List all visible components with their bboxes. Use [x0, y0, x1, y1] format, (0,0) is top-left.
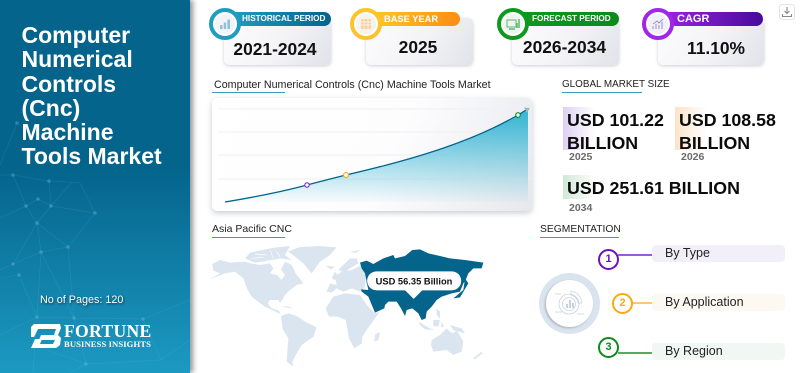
stat: 2034 market size: USD 251.61 BILLION — [567, 178, 740, 198]
panel: CAGR — [642, 8, 766, 68]
heading: segmentation: SEGMENTATION — [540, 224, 621, 235]
stat: 2026 market size — [675, 107, 776, 163]
segment: by type — [598, 245, 785, 270]
segment: by application: 2 — [619, 297, 626, 309]
heading: asia pacific: Asia Pacific CNC — [212, 223, 292, 235]
card — [224, 18, 331, 65]
icon: logo mark — [31, 324, 61, 348]
stat: 2025 market size: USD 101.22 — [567, 110, 664, 130]
area line chart — [218, 108, 530, 203]
header — [374, 12, 460, 26]
card: 2025 — [399, 37, 437, 57]
stat: 2034 market size: 2034 — [569, 202, 592, 214]
logo wordmark: FORTUNE — [64, 321, 152, 341]
card — [512, 18, 619, 65]
segment: by application: By Application — [665, 295, 744, 309]
logo: Fortune Business Insights — [31, 321, 152, 349]
icon: bar chart — [209, 8, 241, 40]
segment: by type: By Type — [665, 246, 710, 260]
panel: line chart card — [212, 98, 532, 211]
panel: historical period — [209, 8, 332, 68]
icon: download — [779, 4, 795, 20]
title: Controls — [22, 71, 116, 97]
header: HISTORICAL PERIOD — [242, 14, 325, 23]
stat: 2025 market size: BILLION — [567, 132, 638, 152]
title: (Cnc) — [22, 95, 80, 121]
world map — [211, 246, 484, 366]
segment: by application — [612, 293, 785, 314]
heading: market chart: Computer Numerical Controls (Cnc) Machine Tools Market — [214, 79, 491, 91]
header: FORECAST PERIOD — [532, 14, 611, 23]
segment: by type: 1 — [605, 253, 612, 265]
panel: base year — [350, 8, 474, 68]
card: 2021-2024 — [233, 39, 317, 59]
card — [366, 18, 473, 65]
text: number of pages: No of Pages: 120 — [40, 294, 123, 306]
stat: 2034 market size — [563, 175, 740, 214]
heading: global market size: GLOBAL MARKET SIZE — [562, 79, 670, 90]
callout: value label — [367, 271, 462, 299]
card: 2026-2034 — [523, 37, 606, 57]
header — [232, 12, 331, 26]
segment: by region: By Region — [665, 344, 723, 358]
asia pacific region — [360, 249, 483, 320]
title: Computer — [22, 22, 130, 48]
title: Tools Market — [22, 143, 162, 169]
icon: growth chart — [642, 8, 674, 40]
network pattern — [0, 121, 190, 373]
icon: segmentation hub — [539, 273, 600, 334]
panel: forecast period — [497, 8, 620, 68]
icon: calendar — [350, 8, 382, 40]
title: Numerical — [22, 46, 133, 72]
stat: 2025 market size — [563, 107, 664, 163]
header — [521, 12, 619, 26]
header: BASE YEAR — [384, 14, 438, 24]
logo tagline: BUSINESS INSIGHTS — [64, 339, 151, 349]
card: 11.10% — [687, 38, 745, 58]
segment: by region: 3 — [605, 341, 612, 353]
stat: 2025 market size: 2025 — [569, 151, 592, 163]
header — [666, 12, 763, 26]
panel: left sidebar — [0, 0, 190, 373]
title — [22, 22, 162, 169]
segment: by region — [598, 337, 785, 360]
header: CAGR — [677, 13, 709, 25]
icon: monitor chart — [497, 8, 529, 40]
stat: 2026 market size: 2026 — [681, 151, 704, 163]
card — [658, 18, 764, 65]
callout: value label: USD 56.35 Billion — [376, 276, 453, 286]
title: Machine — [22, 119, 114, 145]
stat: 2026 market size: BILLION — [679, 132, 750, 152]
stat: 2026 market size: USD 108.58 — [679, 110, 776, 130]
